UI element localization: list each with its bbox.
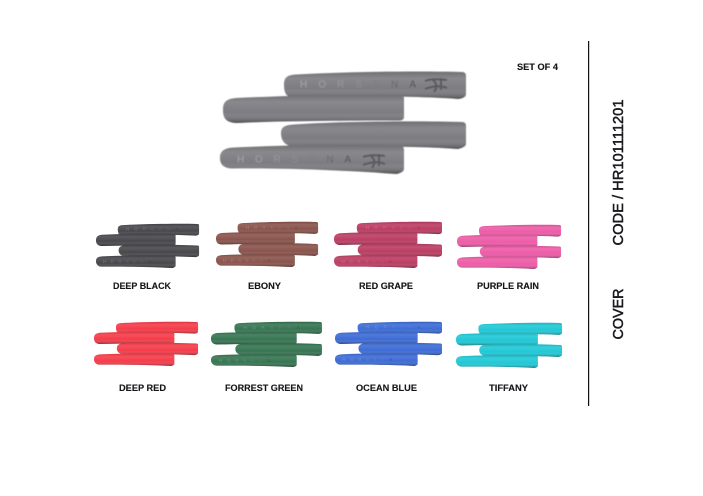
covers: forrest green: HORSENA [219,358,270,363]
brand mark on bottom cover: HORSENA [237,154,351,166]
covers: tiffany [456,323,562,368]
main product image: grey set of four covers [220,72,466,174]
caption: tiffany: TIFFANY [489,383,528,393]
swatch: purple rain [457,225,561,291]
swatch: tiffany [456,323,562,393]
swatch: deep red [94,322,198,393]
covers: deep black: HORSENA [126,227,178,232]
covers: ebony [216,222,318,267]
swatch: ocean blue [335,322,442,393]
brand mark on bottom cover [237,154,385,168]
covers: red grape: HORSENA [341,259,392,264]
covers: ebony: HORSENA [246,225,297,230]
covers: ocean blue: HORSENA [366,325,420,330]
covers: ocean blue: HORSENA [342,357,392,362]
swatch: ebony [216,222,318,291]
set of 4 label: SET OF 4 [517,62,558,72]
covers: purple rain [457,225,561,269]
swatch: red grape [334,222,442,291]
covers: ocean blue [335,322,442,366]
caption: purple rain: PURPLE RAIN [477,281,539,291]
swatch: deep black [96,224,199,291]
caption: red grape: RED GRAPE [359,281,413,291]
brand mark on top cover [300,78,447,92]
product code vertical text: CODE / HR101111201 [611,100,627,246]
caption: deep red: DEEP RED [119,383,167,393]
caption: ocean blue: OCEAN BLUE [356,383,417,393]
covers: red grape [334,222,442,268]
caption: deep black: DEEP BLACK [113,281,171,291]
caption: ebony: EBONY [248,281,281,291]
covers: forrest green [211,322,322,367]
covers: deep black [96,224,199,268]
covers: forrest green: HORSENA [243,325,299,330]
brand mark on top cover: HORSENA [300,80,416,90]
covers: deep black: HORSENA [103,259,151,264]
covers: deep red [94,322,198,366]
swatch: forrest green [211,322,322,393]
covers: red grape: HORSENA [366,225,420,230]
covers: ebony: HORSENA [223,258,271,263]
cover vertical text: COVER [611,288,627,340]
caption: forrest green: FORREST GREEN [225,383,303,393]
